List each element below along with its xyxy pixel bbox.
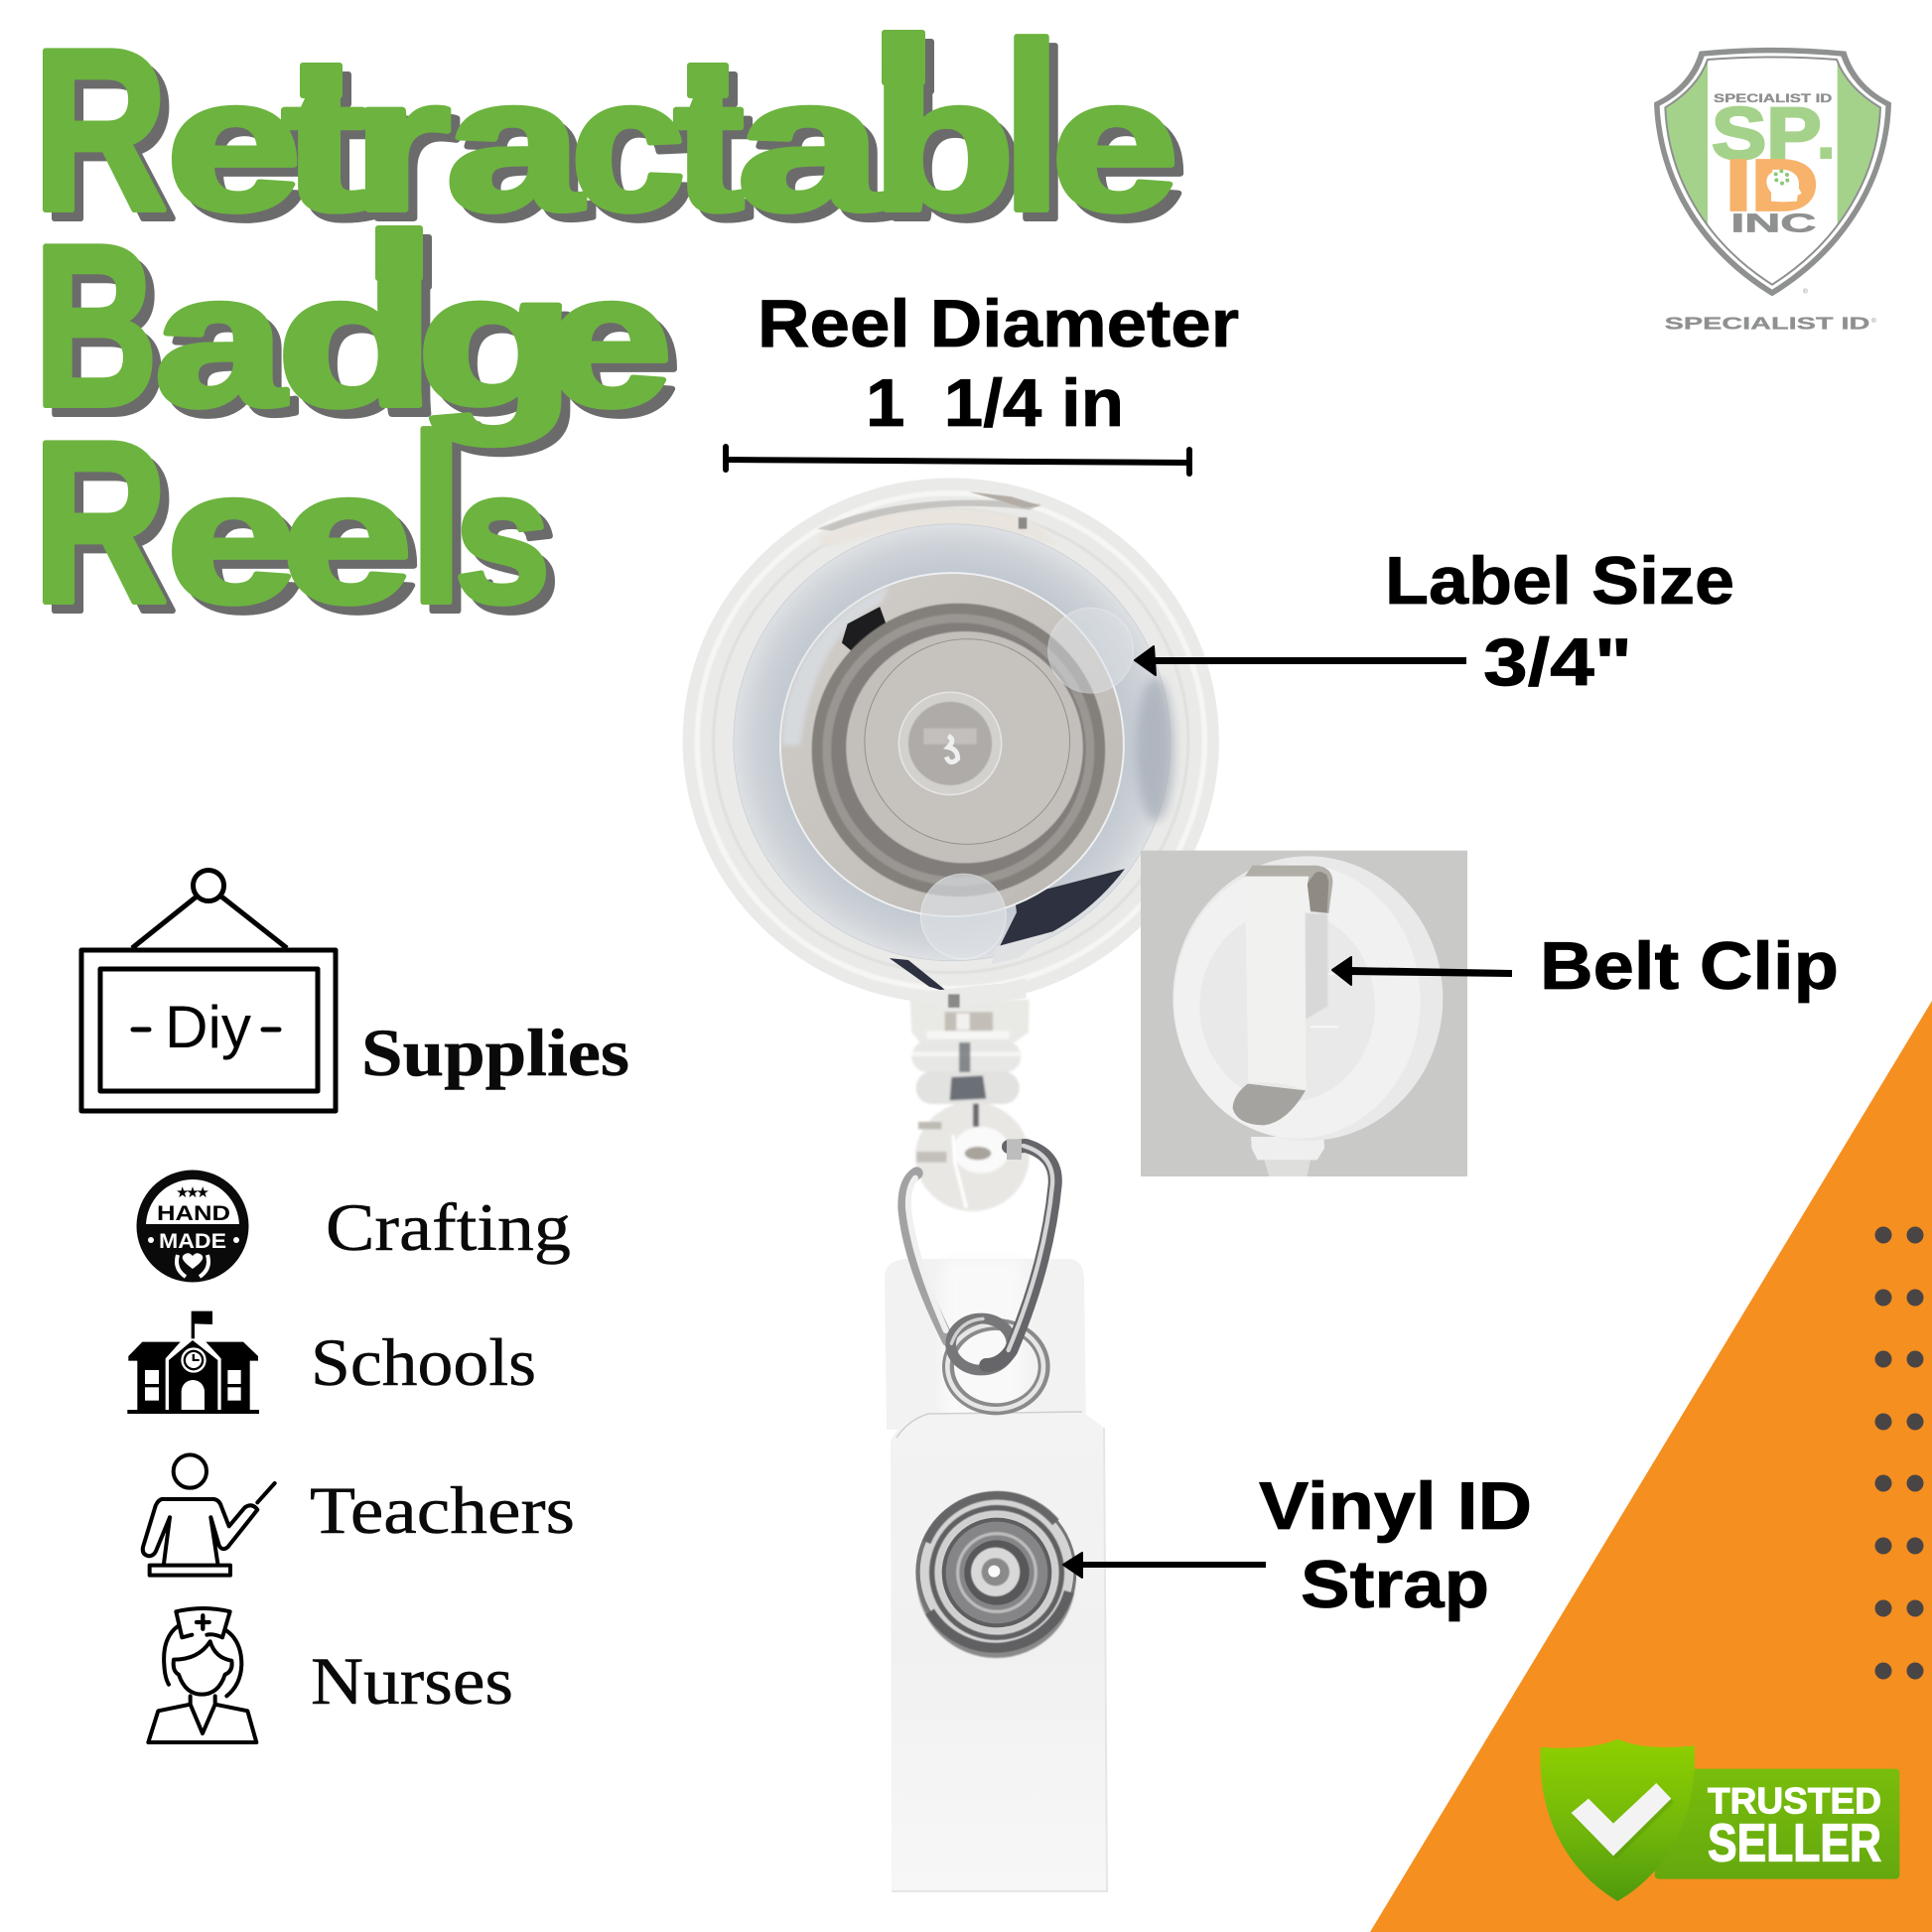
label: reel diameter: 1 1/4 in [866,365,1124,441]
title shadow: l [418,395,473,661]
badge: trusted seller: SELLER [1708,1814,1881,1872]
icon: hand made badge [137,1170,248,1283]
icon: hand made badge: MADE [159,1230,226,1253]
title text: c [571,40,686,250]
title text: e [1051,40,1178,250]
title shadow: b [880,49,1024,259]
logo: Specialist ID shield: SPECIALIST ID [1665,314,1869,334]
title shadow: s [464,441,559,651]
logo: Specialist ID shield: ® [1803,287,1808,295]
title text: e [167,432,298,642]
D-ring and split ring [904,1139,1055,1409]
dimension bar [726,447,1189,474]
text: nurses: Nurses [311,1643,513,1719]
label: label size [1385,543,1734,700]
label: reel diameter [758,286,1239,441]
title text: d [276,235,435,446]
title shadow: d [286,244,445,455]
title shadow: R [42,11,177,268]
reel neck and beads [910,1000,1030,1211]
arrow: vinyl ID strap [1063,1553,1266,1578]
title text: r [351,40,451,250]
metal clip [1233,866,1332,1125]
metal snap [915,1491,1076,1658]
icon: hand made badge: ★★★ [176,1183,209,1201]
title shadow: e [175,49,311,259]
title [33,0,1187,661]
title text: R [33,394,168,651]
arrow: belt clip [1332,957,1512,985]
arrow: label size [1135,646,1466,675]
badge: trusted seller: TRUSTED [1708,1780,1881,1822]
title shadow: a [164,244,295,455]
icon: hand made badge: HAND [157,1202,230,1225]
title text: l [1002,0,1062,260]
title text: R [33,2,168,259]
title shadow: t [683,49,754,259]
title shadow: r [360,49,460,259]
reel back view [1173,856,1443,1176]
label: vinyl ID strap [1259,1468,1532,1622]
title shadow: a [455,49,593,259]
logo: Specialist ID shield: ® [1871,317,1876,325]
title shadow: B [43,207,167,464]
reel photo [683,478,1219,1008]
title shadow: l [1011,3,1070,269]
icon: nurse [148,1608,256,1742]
decorative dot columns [1874,1227,1924,1680]
logo: Specialist ID shield: INC [1730,207,1817,237]
title shadow: a [747,49,893,259]
title text: e [282,432,413,642]
label: label size: 3/4" [1483,624,1632,700]
text: teachers: Teachers [310,1472,575,1548]
belt clip panel [1141,851,1467,1176]
title shadow: c [580,49,695,259]
title text: a [737,40,884,250]
title text: B [34,198,158,455]
logo: Specialist ID shield: ID [1725,147,1818,226]
logo: Specialist ID shield [1654,48,1891,334]
title text [33,0,1178,652]
title shadow: e [555,244,681,455]
title shadow: e [290,441,421,651]
icon: school building [127,1311,259,1414]
label: reel diameter: Reel Diameter [758,286,1239,361]
orange corner triangle [1370,1001,1932,1932]
label: belt clip: Belt Clip [1540,928,1839,1004]
title shadow: R [42,403,177,660]
title text: s [455,432,550,642]
title text: t [282,40,366,250]
title shadow: e [175,441,306,651]
dark reflections [1000,869,1125,947]
title shadow: g [425,244,584,455]
text: schools: Schools [311,1324,536,1400]
badge: trusted seller [1540,1739,1899,1901]
label: label size: Label Size [1385,543,1734,619]
icon: DIY hanging sign [81,870,336,1111]
vinyl ID strap [885,1259,1107,1891]
title text: e [166,40,302,250]
logo: Specialist ID shield: SPECIALIST ID [1714,91,1833,105]
title text: g [417,235,576,446]
title text: t [674,40,745,250]
icon: teacher with pointer [143,1454,275,1576]
title text: b [871,40,1015,250]
label: vinyl ID strap: Strap [1301,1547,1489,1622]
title text: a [446,40,584,250]
text: crafting: Crafting [326,1189,571,1265]
icon: DIY hanging sign: Diy [165,994,251,1060]
title shadow: t [291,49,375,259]
text: supplies: Supplies [361,1015,629,1090]
title shadow [42,3,1187,661]
logo: Specialist ID shield: SP [1712,92,1822,175]
title shadow: e [1060,49,1187,259]
title text: a [155,235,286,446]
label: vinyl ID strap: Vinyl ID [1259,1468,1532,1544]
title text: e [546,235,672,446]
title text: l [409,386,464,652]
shield with check mark [1540,1739,1695,1901]
